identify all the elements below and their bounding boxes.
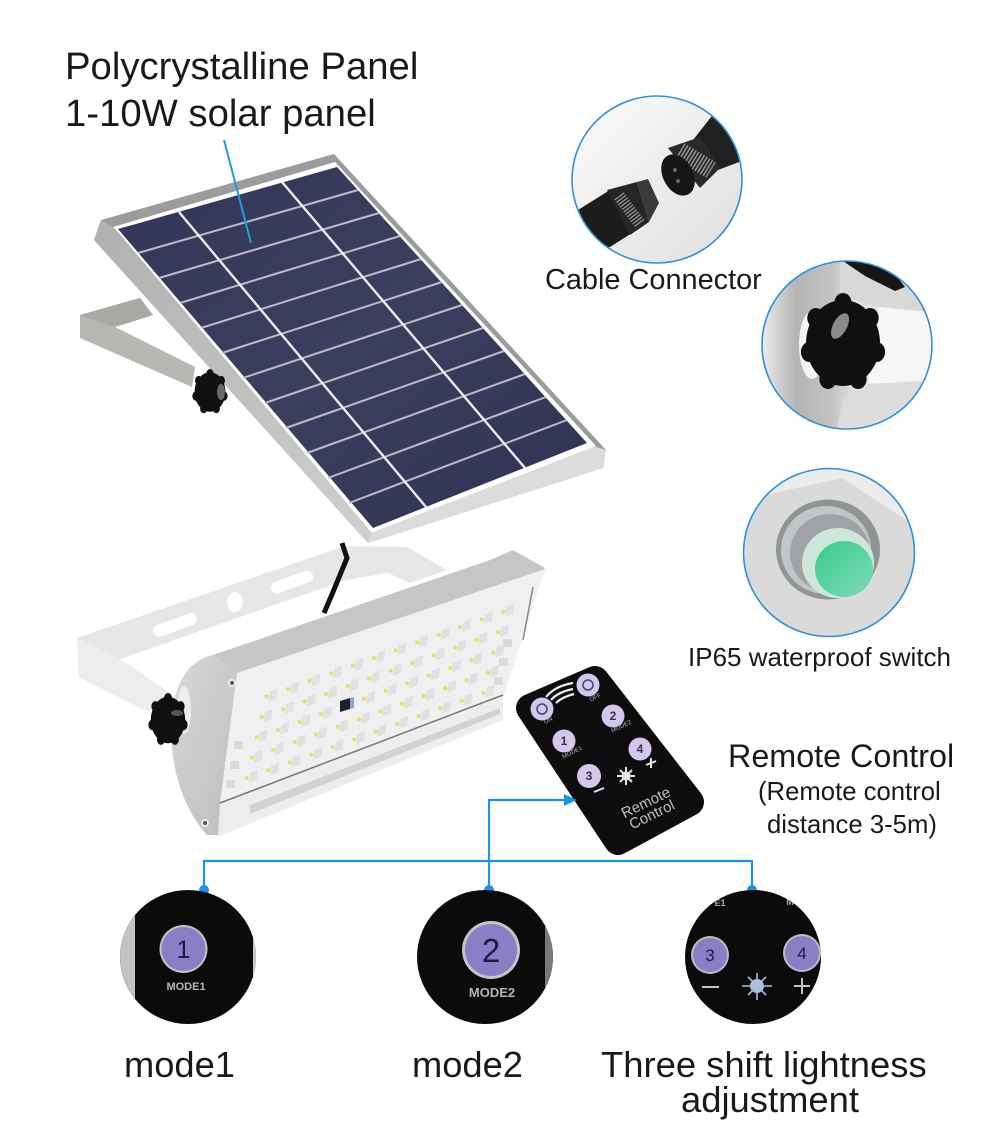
panel frame [94,154,606,543]
remote control: 2 [610,709,617,723]
label: mode1: mode1 [124,1044,235,1085]
detail circle: brightness buttons: M [786,897,794,907]
detail circle: adjustment knob [762,261,940,430]
detail circle: brightness buttons: E1 [714,898,726,908]
housing lower lip [217,695,503,837]
solar panel assembly [80,154,606,543]
small button labels: MODE1 [562,745,584,760]
title: solar panel heading: 1-10W solar panel [65,92,376,135]
lamp knob [148,686,191,745]
remote control: 1 [561,734,568,748]
title: solar panel heading [65,45,418,135]
remote buttons [530,674,652,788]
callout line to solar panel [224,140,251,243]
arm adjustment knob [192,369,228,413]
lamp mounting bracket [77,546,447,712]
power cable [324,543,347,613]
right connector [661,116,740,196]
detail circle: brightness buttons: 4 [797,944,807,963]
arrow: connector lines to remote and mode buttons [199,794,757,895]
label: remote control [728,738,954,839]
label: remote control: Remote Control [728,738,954,774]
remote control: 4 [637,742,644,756]
detail circle: mode 2 button: MODE2 [469,985,515,1000]
detail circle: cable connector [570,96,752,263]
housing front with LEDs [220,569,545,803]
small button labels: OFF [589,693,603,703]
photovoltaic cells [118,167,587,528]
detail circle: mode 1 button [120,890,257,1024]
label: remote control: distance 3-5m) [767,811,937,839]
detail circle: brightness buttons [685,890,821,1024]
label: three shift lightness adjustment: adjustment [681,1079,859,1120]
housing end cap [171,655,237,835]
remote control: 3 [586,769,593,783]
detail circle: brightness buttons: 3 [705,946,715,965]
panel support arm [80,298,195,387]
label: cable connector: Cable Connector [545,264,762,296]
signal arcs [546,683,574,703]
label: mode2: mode2 [412,1044,523,1085]
left connector [578,179,659,248]
LED flood light [148,550,545,837]
small button labels [543,693,633,760]
label: waterproof switch: IP65 waterproof switch [688,642,951,672]
label: remote control: (Remote control [758,778,941,806]
small button labels: ON [543,716,554,726]
remote control [530,674,690,841]
label: three shift lightness adjustment [601,1044,927,1120]
brightness symbols [594,758,656,792]
remote body [530,680,690,841]
detail circle: waterproof switch [743,468,914,636]
housing top [213,550,545,673]
detail circle: mode 2 button: 2 [482,932,500,969]
printed remote label: Control [627,797,677,833]
title: solar panel heading: Polycrystalline Panel [65,45,418,88]
label: three shift lightness adjustment: Three shift lightness [601,1044,927,1085]
screws [202,680,235,826]
detail circle: mode 1 button: MODE1 [166,981,206,993]
small button labels: MODE2 [611,719,633,734]
detail circle: mode 1 button: 1 [177,936,190,964]
detail circle: mode 2 button [417,890,553,1024]
printed remote label: Remote [619,784,673,822]
